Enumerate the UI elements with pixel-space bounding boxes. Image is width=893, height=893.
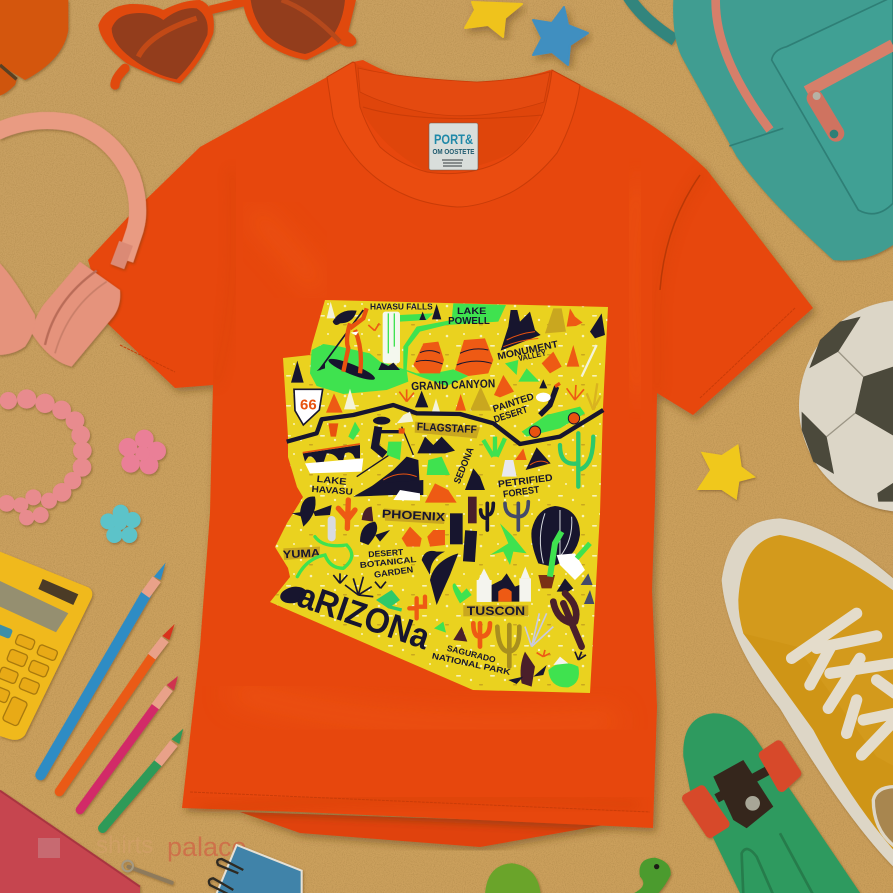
rear wheel	[763, 745, 797, 787]
green pencil	[103, 729, 183, 828]
neck label: PORT&	[434, 131, 473, 147]
truck	[713, 760, 773, 828]
petrified label: PETRIFIED	[497, 473, 553, 490]
orange pencil	[59, 624, 175, 792]
orange canyon rocks	[413, 342, 444, 373]
skyscrapers	[450, 497, 477, 562]
back hem	[240, 812, 610, 847]
opening	[873, 787, 893, 847]
sedona label: SEDONA	[452, 446, 477, 486]
front wheel	[687, 790, 725, 833]
neck label: OM OOSTETE	[432, 147, 474, 156]
paddleboarder	[317, 308, 377, 383]
botanical garden label: BOTANICAL	[359, 554, 417, 570]
dark rocks	[417, 437, 455, 453]
saguaro national park label	[431, 643, 511, 677]
central dark mountain	[367, 457, 420, 490]
shirt body	[88, 60, 813, 828]
large brown saguaro	[553, 593, 582, 647]
blue notebook	[209, 845, 302, 893]
lake havasu label: LAKE	[316, 474, 347, 487]
botanical garden label: GARDEN	[373, 564, 414, 580]
orange cactus south	[409, 597, 425, 618]
solar strip	[38, 579, 78, 605]
grand canyon label: GRAND CANYON	[411, 377, 495, 393]
green succulent	[483, 437, 505, 457]
main zipper	[716, 0, 770, 130]
lake powell label: LAKE	[457, 306, 486, 316]
london bridge	[303, 444, 363, 473]
lantern and leaf	[328, 423, 338, 437]
painted desert label: PAINTED	[492, 391, 536, 415]
green cactus pads	[490, 523, 527, 565]
lake powell label: POWELL	[448, 316, 490, 327]
small orange plant	[537, 650, 550, 657]
zipper pull	[128, 867, 172, 883]
left lens	[112, 8, 208, 79]
hiker	[357, 417, 413, 477]
bag body	[673, 0, 893, 260]
route 66 sign: 66	[300, 396, 317, 413]
pencils	[41, 563, 183, 828]
green toy frog	[485, 863, 541, 893]
yellow star on cork	[697, 444, 756, 500]
hot air balloon	[531, 506, 590, 588]
mission church	[477, 567, 531, 602]
bracelet of beads	[0, 389, 92, 525]
saguaro national park label: NATIONAL PARK	[431, 651, 511, 677]
desert icons	[545, 308, 566, 333]
heart sunglasses	[98, 0, 356, 85]
cacti group center	[481, 503, 493, 530]
Arizona map print	[270, 300, 608, 693]
back collar band	[358, 68, 550, 116]
yellow star top	[465, 2, 522, 37]
phoenix label: PHOENIX	[382, 508, 446, 524]
pocket zipper	[807, 45, 893, 92]
green lake powell area	[403, 303, 506, 386]
orange cactus	[338, 500, 355, 528]
neck interior	[355, 63, 552, 172]
collar ribbing	[327, 62, 580, 207]
green toy dinosaur	[630, 858, 671, 893]
green car with driver	[522, 383, 585, 437]
dark prickly pear center	[422, 551, 458, 605]
route highway	[287, 405, 603, 444]
green barrel cactus	[376, 590, 400, 608]
monument valley label: VALLEY	[517, 348, 548, 363]
northern map details	[287, 301, 605, 490]
front pocket	[772, 0, 893, 214]
forest label: FOREST	[502, 485, 540, 501]
flagstaff label: FLAGSTAFF	[417, 421, 477, 436]
saguaro national park label: SAGURADO	[446, 643, 497, 665]
soccer ball	[799, 300, 893, 512]
skateboard	[683, 713, 863, 893]
tucson label: TUSCON	[467, 605, 525, 618]
calculator display	[0, 581, 68, 632]
leaf clusters	[368, 323, 584, 402]
laces	[792, 613, 893, 755]
green snake	[297, 537, 352, 577]
painted desert label	[492, 391, 536, 426]
route 66 sign	[294, 389, 323, 425]
waterfall	[378, 312, 400, 370]
headband	[0, 121, 138, 260]
lake havasu label: HAVASU	[311, 484, 353, 497]
silver ocotillo	[525, 613, 553, 647]
orange rocks	[402, 527, 422, 547]
deck	[683, 713, 863, 893]
left ear cup	[0, 262, 35, 355]
right lens	[251, 0, 345, 54]
green lake area west	[310, 344, 408, 394]
hiker rock base	[353, 480, 423, 497]
calculator buttons	[0, 634, 58, 727]
orange t-shirt	[88, 60, 813, 847]
botanical garden label: DESERT	[368, 547, 404, 559]
southern map details	[279, 474, 594, 687]
lake powell label	[448, 306, 490, 327]
lake havasu label	[311, 474, 353, 497]
rocks right	[557, 578, 573, 592]
prickly pear west	[292, 497, 332, 527]
state speckles	[270, 300, 608, 693]
sole	[722, 518, 893, 868]
watermark: shirts	[96, 832, 153, 859]
right ear cup	[32, 262, 120, 367]
orange cactus near tuscon	[473, 623, 490, 647]
monument valley butte	[501, 310, 541, 351]
small trees	[291, 304, 547, 407]
headphones	[0, 121, 138, 367]
dark cactus south	[508, 652, 547, 687]
teal flower	[100, 505, 141, 543]
monument valley label: MONUMENT	[496, 339, 559, 363]
havasu falls label: HAVASU FALLS	[370, 301, 433, 311]
botanical garden label	[359, 547, 417, 580]
yellow sneaker	[722, 518, 893, 868]
watermark	[38, 832, 247, 862]
blue star top	[533, 7, 588, 65]
calculator	[0, 552, 92, 740]
left temple arm	[115, 68, 125, 85]
pink flower	[119, 430, 166, 474]
watermark: palace	[167, 832, 247, 862]
saguaro green	[560, 433, 593, 487]
dark cactus pads	[360, 507, 390, 545]
backpack	[628, 0, 893, 260]
zipper pull	[815, 98, 836, 133]
bridge	[210, 2, 245, 10]
olive saguaro	[497, 625, 519, 667]
painted desert label: DESERT	[493, 404, 529, 426]
shirt shading folds	[200, 170, 706, 810]
green barrel with white flower	[548, 657, 579, 687]
small agave south	[575, 652, 586, 660]
agave plants	[333, 573, 386, 597]
pink pouch	[0, 790, 172, 893]
yuma label: YUMA	[283, 547, 321, 561]
upper	[738, 535, 893, 850]
pink pencil	[80, 676, 178, 810]
right heart frame	[243, 0, 356, 60]
neck label	[429, 123, 478, 170]
arizona wordmark: aRIZONa	[293, 576, 435, 657]
state outline	[270, 300, 608, 693]
left heart frame	[98, 0, 214, 83]
petrified logs	[502, 460, 517, 477]
blue pencil	[41, 563, 166, 775]
rocks and small icons	[453, 627, 467, 642]
strap	[628, 0, 675, 40]
orange ball, top left	[0, 0, 68, 96]
